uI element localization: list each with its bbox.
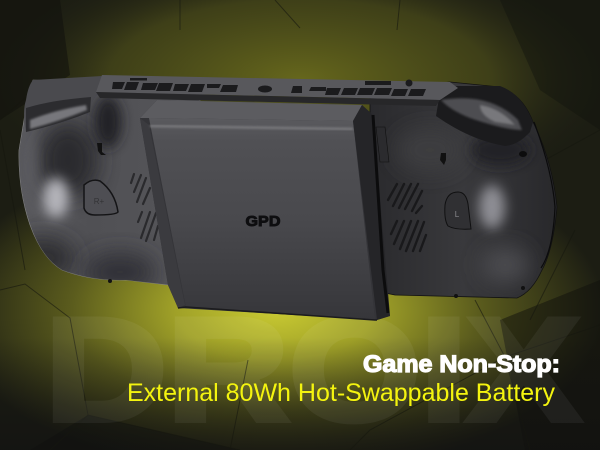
battery logo: GPD <box>246 213 281 230</box>
battery pack <box>140 100 390 320</box>
right grip <box>370 82 557 298</box>
right shoulder button <box>445 192 471 229</box>
right vent grille <box>388 184 426 251</box>
left grip <box>8 76 200 292</box>
watermark: DROIX: DROIX <box>45 288 580 450</box>
caption <box>127 351 560 407</box>
left shoulder button <box>84 180 118 215</box>
left shoulder button: R+ <box>94 197 105 206</box>
device: handheld rear view <box>8 75 557 320</box>
top vent bar <box>96 75 458 106</box>
small buttons and switches <box>97 127 446 165</box>
caption heading: Game Non-Stop: <box>363 351 560 378</box>
right shoulder button: L <box>455 210 460 219</box>
left vent grille <box>131 174 158 241</box>
caption subheading: External 80Wh Hot-Swappable Battery <box>127 379 555 407</box>
